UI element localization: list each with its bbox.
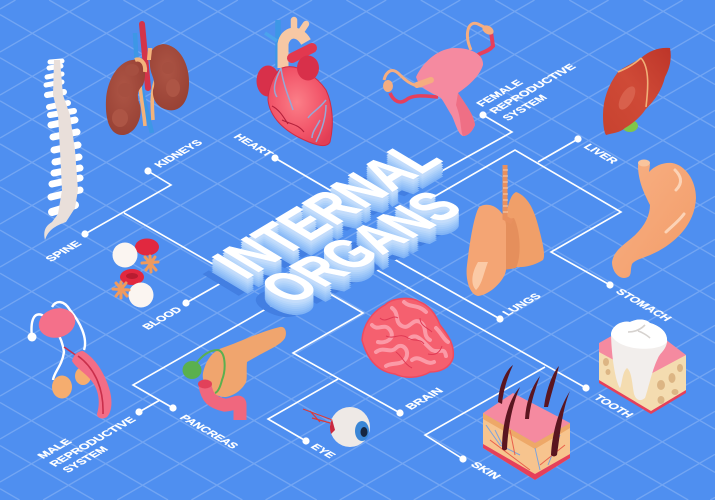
organ labels: PANCREAS xyxy=(176,413,240,451)
icon: lungs xyxy=(467,165,544,296)
icon: liver xyxy=(603,48,671,135)
organ labels: SYSTEM xyxy=(60,445,111,475)
title: internal organs: ORGANS xyxy=(245,183,477,311)
title: internal organs: INTERNAL xyxy=(199,148,455,302)
icon: kidneys xyxy=(106,24,189,135)
organ labels: SYSTEM xyxy=(500,93,550,123)
organ labels: LUNGS xyxy=(500,292,544,318)
title: internal organs: ORGANS xyxy=(245,192,477,320)
organ labels: EYE xyxy=(307,442,338,460)
title: internal organs: ORGANS xyxy=(245,188,477,316)
title: internal organs: ORGANS xyxy=(245,186,477,314)
organ labels: REPRODUCTIVE xyxy=(487,62,579,116)
icon: spine xyxy=(44,60,80,240)
organ labels: KIDNEYS xyxy=(152,138,206,170)
icon: brain xyxy=(362,298,453,377)
title: internal organs: INTERNAL xyxy=(199,140,455,294)
title: internal organs: INTERNAL xyxy=(199,146,455,300)
title: internal organs: INTERNAL xyxy=(199,144,455,298)
organ labels: LIVER xyxy=(580,142,620,166)
organ labels: TOOTH xyxy=(590,393,635,420)
title: internal organs: INTERNAL xyxy=(199,142,455,296)
title: internal organs: INTERNAL xyxy=(199,136,455,290)
icon: male reproductive system xyxy=(28,302,111,418)
organ labels: FEMALE xyxy=(474,78,526,109)
icon: tooth xyxy=(599,320,686,414)
icon: pancreas xyxy=(182,327,286,420)
organ labels: BLOOD xyxy=(140,305,185,332)
organ labels: STOMACH xyxy=(612,287,674,323)
title: internal organs: ORGANS xyxy=(245,190,477,318)
title: internal organs: INTERNAL xyxy=(199,138,455,292)
icon: eye xyxy=(303,407,370,447)
icon: blood cells xyxy=(112,238,159,308)
organ labels xyxy=(35,62,674,481)
icon: skin xyxy=(483,365,570,480)
title: internal organs: ORGANS xyxy=(245,196,477,324)
title: internal organs: ORGANS xyxy=(236,200,468,328)
organ labels: SPINE xyxy=(43,239,85,264)
connector lines xyxy=(81,111,621,463)
title: internal organs: ORGANS xyxy=(245,198,477,326)
organ labels: SKIN xyxy=(467,460,503,481)
title: internal organs: INTERNAL xyxy=(199,133,455,287)
icon: stomach xyxy=(612,160,696,278)
organ labels: REPRODUCTIVE xyxy=(47,415,139,469)
organ labels: MALE xyxy=(35,437,75,461)
organ labels: HEART xyxy=(230,132,276,159)
title: internal organs: ORGANS xyxy=(245,194,477,322)
title: internal organs: INTERNAL xyxy=(190,150,446,304)
organ labels: BRAIN xyxy=(403,386,447,412)
icon: heart xyxy=(256,20,332,146)
icon: female reproductive system xyxy=(383,23,495,136)
